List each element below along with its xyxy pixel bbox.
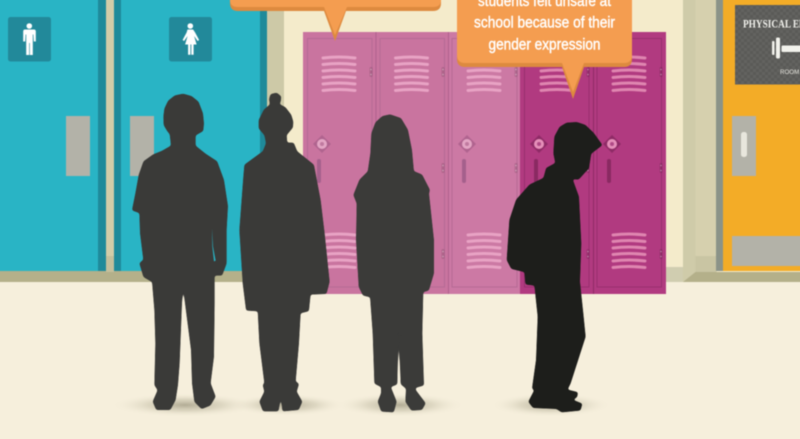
locker 4 [520,32,593,294]
locker 1 [303,32,376,294]
pe door handle [741,132,747,157]
wall [0,0,800,275]
boys door plate [66,116,90,176]
locker 2 [376,32,448,294]
speech bubble top [230,0,441,41]
girls sign [169,17,212,62]
lockers [303,32,666,294]
icon: woman [183,23,199,55]
silhouette: student 3 [354,115,433,412]
silhouette: student 2 [240,93,329,411]
icon: dumbbell [772,38,800,58]
kick plate [732,236,800,266]
silhouette: student 1 [133,94,227,409]
pe door plate [732,116,756,176]
locker 3 [448,32,520,294]
baseboard right [660,267,684,282]
door frame right [267,0,284,272]
floor shadows [111,393,611,417]
sign: physical education [735,5,800,84]
physical education door [716,0,800,271]
door frame centre [106,0,114,272]
floor [0,272,800,439]
boys sign [8,17,51,62]
silhouette: student 4 with backpack [507,123,602,412]
callout text: gender expression [488,36,600,54]
locker 5 [593,32,666,294]
icon: man [23,23,36,55]
callout text [474,0,615,54]
pillar right [683,0,800,282]
baseboard left [0,271,305,282]
girls door plate [130,116,154,176]
callout text: school because of their [474,14,615,32]
speech bubble statistic [457,0,632,99]
boys restroom door [0,0,114,272]
girls restroom door [114,0,284,272]
